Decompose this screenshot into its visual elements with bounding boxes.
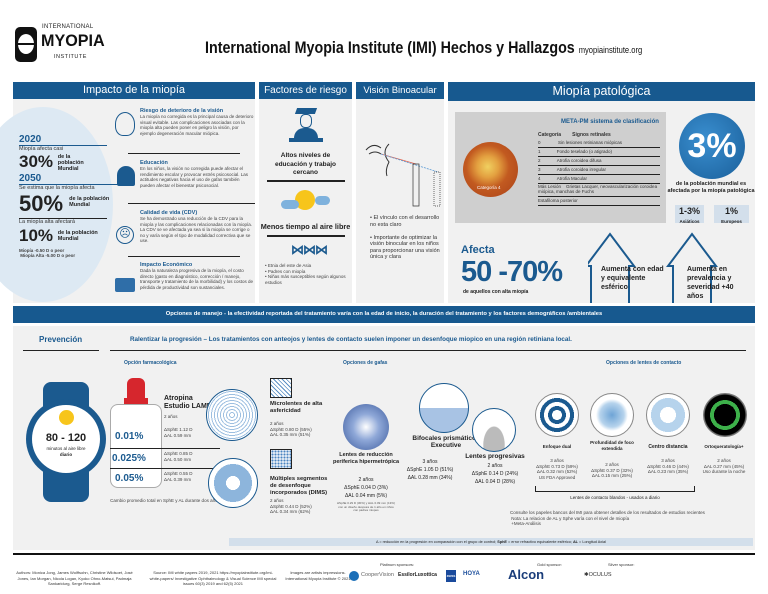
panel: bottom treatments: 2 años (358, 477, 374, 483)
panel: bottom treatments: Executive (431, 442, 461, 449)
panel: impacto: Educación (140, 160, 168, 166)
panel: bottom treatments: ΔSphE 0.80 D (55%) (270, 427, 312, 432)
stats: Miopía afecta casi (19, 146, 63, 152)
panel: miopia patologica (448, 82, 755, 303)
panel: bottom treatments: ΔAL 0.15 mm (25%) (592, 473, 632, 478)
panel: factores de riesgo: • Padres con miopía (265, 269, 305, 274)
classification box: Categoría 4 (477, 185, 501, 190)
panel: miopia patologica: de la población mundial es afectada por la miopía patológica (667, 181, 755, 194)
panel: bottom treatments: ΔSphE 0.46 D (44%) (647, 464, 689, 469)
stats: 30% (19, 152, 53, 171)
classification box: 4 Atrofia Macular (538, 176, 587, 181)
stats: Miopía Alta -5.00 D o peor (20, 253, 75, 258)
title: International Myopia Institute (IMI) Hechos y Hallazgos myopiainstitute.org (205, 38, 642, 57)
footer: Images are artists impressions. (290, 570, 346, 575)
globe 3% (679, 113, 745, 179)
panel: impacto: Dada la naturaleza progresiva de la miopía, el costo directo (gasto en diagnóstico, corrección / manejo, transporte y tratamiento de la morbilidad) y los costos de pérdida de productividad son sustanciales. (140, 268, 253, 290)
bracket (535, 486, 695, 492)
panel: bottom treatments: incorporados (DIMS) (270, 490, 327, 496)
panel: impacto: Se ha demostrado una reducción de la CDV para la miopía y las complicaciones relacionadas con la miopía. La CDV se ve afectada ya sea si la miopía se corrige o no y varía según el tipo de modalidad correctiva que se use. (140, 216, 252, 243)
globe 3%: 3% (687, 127, 737, 165)
panel: impacto: Riesgo de deterioro de la visión (140, 108, 223, 114)
footer: HOYA (463, 571, 480, 577)
icon: atropine bottle: 0.05% (115, 473, 143, 484)
panel: bottom treatments: +Meta-Análisis (511, 521, 541, 526)
panel: impacto: ☹ (119, 228, 131, 240)
panel: miopia patologica: 1-3% (679, 206, 700, 216)
icon: watch: diario (60, 452, 72, 456)
icon: watch: 80 - 120 (46, 432, 86, 444)
panel: miopia patologica: Asiáticos (679, 219, 700, 224)
logo: MYOPIA (41, 31, 105, 50)
panel: bottom treatments: Bifocales prismáticos (412, 435, 480, 442)
panel: bottom treatments: Centro distancia (648, 444, 688, 450)
icon: watch (26, 382, 106, 502)
panel: impacto (13, 82, 255, 303)
stats: 2050 (19, 173, 41, 184)
panel: miopia patologica: 1% (725, 206, 738, 216)
logo: INTERNATIONAL (42, 24, 93, 30)
panel: miopia patologica: y equivalente (601, 275, 645, 282)
panel: bottom treatments: asfericidad (270, 408, 301, 414)
panel: impacto: En los niños, la visión no corregida puede afectar el rendimiento escolar y provocar estrés psicosocial. Las actitudes negativas hacia el uso de gafas también pueden afectar el bienestar psicosocial. (140, 166, 248, 188)
panel: vision binocular: • Importante de optimizar la visión binocular en los niños para proporcionar una visión única y clara (370, 234, 440, 260)
panel: bottom treatments: Múltiples segmentos (270, 476, 327, 482)
stats: Mundial (69, 202, 90, 208)
icon: sun clouds (281, 190, 330, 210)
classification box: 0 Sin lesiones retinianas miópicas (538, 140, 622, 145)
classification box: 1 Fondo teselado (o atigrado) (538, 149, 612, 154)
panel: bottom treatments: Enfoque dual (543, 444, 571, 449)
footer: EssilorLuxottica (398, 572, 437, 578)
contact: profundidad de foco (590, 393, 634, 437)
footer: International Myopia Institute © 2021 (285, 576, 351, 580)
panel: impacto: Impacto Económico (140, 262, 192, 268)
panel: bottom treatments: Estudio LAMP (164, 403, 211, 410)
panel: bottom treatments: ΔAL 0.39 mm (164, 477, 191, 482)
lens: bifocal (419, 383, 469, 433)
icon: atropine bottle (110, 378, 220, 488)
panel: factores de riesgo: cercano (293, 169, 318, 176)
panel: bottom treatments: ΔSphE 0.44 D (52%) (270, 504, 312, 509)
panel: bottom treatments: Consulte los papeles bancos del IMI para obtener detalles de los resultados de estudios recientes (510, 510, 705, 515)
panel: bottom treatments: Profundidad de foco extendida (590, 440, 634, 451)
panel: bottom treatments: ΔAL 0.59 mm (164, 433, 191, 438)
panel: impacto: La miopía no corregida es la principal causa de deterioro visual evitable. Las complicaciones asociadas con la miopía alta pueden poner en peligro la visión, por ejemplo degeneración macular miópica. (140, 114, 253, 136)
panel: factores de riesgo: educación y trabajo (275, 160, 336, 168)
stats: 2020 (19, 134, 41, 145)
panel: miopia patologica: 50 -70% (461, 256, 562, 288)
panel: bottom treatments: ΔSphE 0.04 D (3%) (344, 485, 388, 491)
panel: bottom treatments: Nota: La relacion de AL y Sphe varía con el nivel de miopía (511, 516, 629, 521)
classification box: META-PM sistema de clasificación (561, 119, 659, 125)
panel: bottom treatments: ΔAL 0.04 mm (5%) (345, 493, 387, 499)
panel: bottom treatments: Cambio promedio total en SphE y AL durante dos años (110, 498, 220, 503)
arrows (588, 232, 718, 303)
footer: Source: IMI white papers 2019, 2021 https://myopiainstitute.org/imi-white-papers/ Investigative Ophthalmology & Visual Science IMI special issues 60(3) 2019 and 62(5) 2021 (150, 570, 276, 586)
lens: progresivas (472, 408, 516, 452)
panel: miopia patologica: Aumenta con edad (601, 266, 664, 273)
panel: bottom treatments: ΔSphE 0.73 D (59%) (536, 464, 578, 469)
panel: bottom treatments: Lentes de contacto blandos - usados a diario (570, 495, 660, 500)
impact items (115, 108, 255, 292)
footer: Authors: Monica Jong, James Wolffsohn, Christine Wildsoet, José Jones, Ian Morgan, Nicola Logan, Kyoko Ohno-Matsui, Padmaja Sankaridurg, Serge Resnikoff. (16, 570, 133, 586)
panel: bottom treatments: ΔSphE 0.85 D (164, 451, 193, 456)
banner: opciones de manejo (13, 306, 755, 323)
panel: bottom treatments: ΔSphE 0.29 D (30%) y ΔAL 0.09 mm (13%) con un diseño después de 1 año en niños con padres miopes (337, 501, 395, 512)
panel: bottom treatments: ΔAL 0.28 mm (34%) (408, 475, 452, 481)
stats: Mundial (58, 236, 79, 242)
panel: miopia patologica: severidad +40 (687, 284, 734, 291)
panel: bottom treatments: Atropina (164, 395, 193, 402)
footnote bar (229, 538, 753, 546)
heading: ralentizar: Ralentizar la progresión – Los tratamientos con anteojos y lentes de contacto suelen imponer un desenfoque miopico en una región retiniana local. (130, 336, 572, 343)
panel: bottom treatments: Lentes de reducción periferica hipermetrópica (333, 452, 399, 464)
panel: bottom treatments: Ortoqueratología+ (704, 444, 744, 449)
footer: ZEISS (447, 574, 455, 578)
classification box: 2 Atrofia coroidea difusa (538, 158, 602, 163)
stats: de la (58, 154, 70, 160)
panel: impacto: Impacto de la miopía (83, 84, 185, 96)
stats: Se estima que la miopía afecta (19, 185, 95, 191)
panel: bottom treatments: ΔAL 0.32 mm (52%) (537, 469, 577, 474)
icon: atropine bottle: 0.01% (115, 431, 143, 442)
panel: miopia patologica: esférico (601, 284, 628, 291)
panel: factores de riesgo: Altos niveles de (281, 152, 330, 159)
stats (19, 134, 118, 258)
classification box: Categoría Signos retinales (538, 132, 611, 138)
sponsor logos (349, 571, 359, 581)
panel: bottom treatments: Uso durante la noche (703, 469, 745, 474)
panel: impacto: Calidad de vida (CDV) (140, 210, 197, 216)
panel: factores de riesgo: Factores de riesgo (264, 85, 347, 96)
heading: opciones de lentes de contacto: Opciones de lentes de contacto (606, 360, 681, 366)
panel: bottom treatments: 3 años (550, 458, 564, 463)
panel: bottom treatments: ΔAL 0.23 mm (35%) (648, 469, 688, 474)
footer: Platinum sponsors: (380, 562, 414, 567)
panel: bottom treatments: ΔAL 0.50 mm (164, 457, 191, 462)
icon: dna: ⋈⋈⋈ (291, 242, 327, 257)
panel: miopia patologica: de aquellos con alta miopía (463, 289, 528, 295)
stats: 50% (19, 191, 63, 216)
panel: vision binocular: Visión Binoacular (363, 85, 437, 96)
panel: bottom treatments: 2 años (717, 458, 731, 463)
panel: bottom treatments: 2 años (270, 421, 284, 426)
icon: atropine bottle: 0.025% (112, 453, 146, 464)
panel: vision binocular: • El vínculo con el desarrollo no esta claro (370, 215, 439, 228)
classification box: 3 Atrofia coroidea irregular (538, 167, 606, 172)
panel: vision binocular (356, 82, 444, 303)
panel: bottom treatments: ΔSphE 0.14 D (24%) (472, 471, 518, 477)
stats: Miopía -0.50 D o peor (19, 248, 64, 253)
panel: bottom treatments: ΔSphE 0.55 D (164, 471, 193, 476)
heading: opcion farmacologica: Opción farmacológica (124, 360, 177, 366)
contact: ortoqueratologia (703, 393, 747, 437)
panel: bottom treatments: de desenfoque (270, 483, 311, 489)
panel: bottom treatments: ΔSphE 1.12 D (164, 427, 193, 432)
icon: watch: minutos al aire libre (46, 446, 86, 451)
stats: de la población (58, 230, 98, 236)
footer: ✱OCULUS (584, 572, 612, 578)
icon: DIMS lens (208, 458, 258, 508)
panel: bottom treatments: ΔAL 0.04 D (28%) (475, 479, 515, 485)
footer (16, 562, 634, 586)
panel: bottom treatments: ΔSphE 0.37 D (32%) (591, 468, 633, 473)
panel: miopia patologica: Europeos (721, 219, 742, 224)
panel: bottom treatments: ΔAL 0.35 mm (51%) (270, 432, 310, 437)
icon: microlens lens (206, 389, 258, 441)
panel: bottom treatments: 2 años (164, 414, 178, 419)
panel: bottom treatments: 3 años (422, 459, 438, 465)
panel: bottom treatments: ΔSphE 1.05 D (51%) (407, 467, 453, 473)
footnote bar: Δ = reducción en la progresión en comparación con el grupo de control; SphE = error refractivo equivalente esférico; AL = Longitud Axial (376, 540, 606, 544)
heading: prevencion: Prevención (39, 335, 82, 344)
stats: población (58, 160, 84, 166)
panel: bottom treatments (13, 326, 755, 550)
panel: miopia patologica: prevalencia y (687, 275, 731, 282)
lens: reduccion periferica (343, 404, 389, 450)
footer: Gold sponsor: (537, 562, 562, 567)
footer: Silver sponsor: (608, 562, 634, 567)
stats: Mundial (58, 166, 79, 172)
panel: bottom treatments: US FDA Approved (539, 475, 575, 480)
afecta stat: Afecta (461, 244, 495, 256)
footer: Alcon (508, 567, 544, 582)
panel: miopia patologica: años (687, 293, 703, 300)
icon: eyes and pencils (366, 144, 440, 206)
panel: bottom treatments: ΔAL 0.27 mm (45%) (704, 464, 744, 469)
contact: enfoque dual (535, 393, 579, 437)
classification box: Más Lesión Grietas Lacquer, neovascularización coroidea miópica, manchas de Fuchs (538, 184, 657, 194)
classification box (455, 112, 666, 223)
stats: La miopía alta afectará (19, 219, 75, 225)
panel: miopia patologica: Aumenta en (687, 266, 727, 273)
panel: bottom treatments: ΔAL 0.34 mm (62%) (270, 509, 310, 514)
classification box: Estafiloma posterior (538, 198, 578, 203)
stats: 10% (19, 226, 53, 245)
panel: bottom treatments: 2 años (605, 462, 619, 467)
panel: bottom treatments: 2 años (487, 463, 502, 469)
panel: factores de riesgo: • Etnia del este de Asia (265, 263, 311, 268)
stats: de la población (69, 196, 109, 202)
panel: bottom treatments: Microlentes de alta (270, 401, 322, 407)
panel: bottom treatments: 3 años (661, 458, 675, 463)
panel: factores de riesgo (259, 82, 352, 303)
contact: centro distancia (646, 393, 690, 437)
heading: opciones de gafas: Opciones de gafas (343, 360, 387, 366)
panel: factores de riesgo: Menos tiempo al aire libre (261, 222, 350, 231)
panel: bottom treatments: Lentes progresivas (465, 453, 525, 460)
panel: bottom treatments: 2 años (270, 498, 284, 503)
panel: miopia patologica: Miopía patológica (552, 84, 650, 98)
logo (15, 24, 105, 62)
panel: factores de riesgo: • Niñas más susceptibles según algunos estudios (265, 274, 346, 285)
icon: graduate (289, 108, 323, 142)
banner: opciones de manejo: Opciones de manejo - la efectividad reportada del tratamiento varía con la edad de inicio, la duración del tratamiento y los factores demográficos /ambientales (166, 311, 602, 317)
logo: INSTITUTE (54, 54, 87, 60)
footer: CooperVision (361, 572, 394, 578)
